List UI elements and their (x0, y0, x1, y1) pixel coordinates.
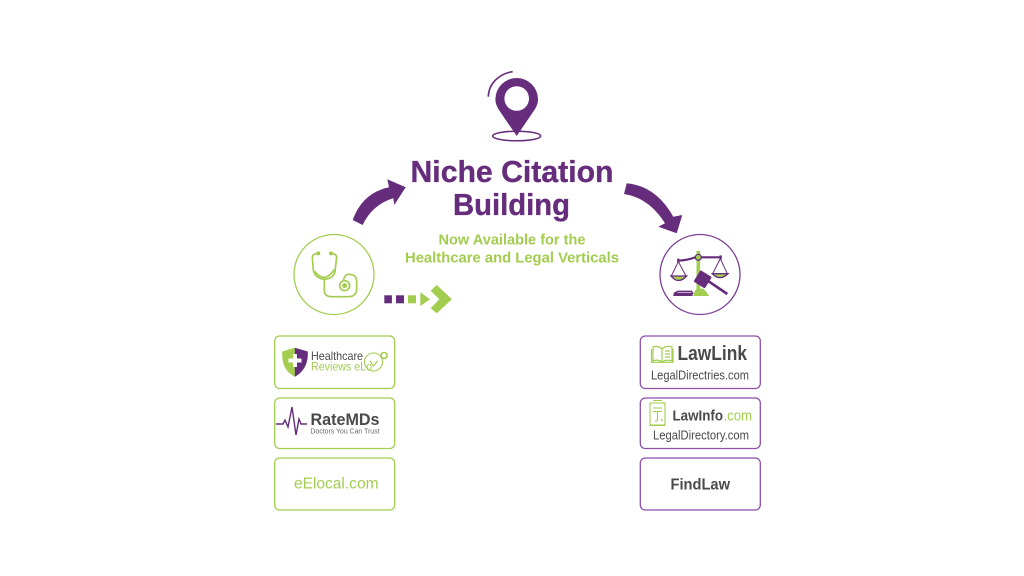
panel: Healthcare Reviews eLocal (275, 336, 395, 388)
panel: FindLaw (640, 458, 760, 510)
arrow: healthcare to title (353, 179, 406, 225)
title (410, 155, 614, 222)
panel: Healthcare Reviews eLocal: Healthcare (311, 349, 363, 363)
panel: LawInfo (640, 398, 760, 448)
panel: LawInfo: .com (724, 408, 752, 425)
panel: RateMDs: Doctors You Can Trust (310, 426, 380, 436)
panel: LawLink: LawLink (678, 343, 748, 365)
panel: eElocal (275, 458, 395, 510)
panel: FindLaw: FindLaw (670, 476, 731, 494)
icon: pulse (276, 407, 307, 435)
panel: RateMDs (275, 398, 395, 448)
panel: eElocal: eElocal.com (294, 476, 378, 492)
icon: open book (652, 346, 673, 362)
panel: LawInfo: LegalDirectory.com (653, 428, 749, 442)
icon: scroll (650, 400, 666, 426)
icon: shield (282, 348, 308, 377)
icon: scales and gavel circle (660, 234, 740, 314)
panel: RateMDs: RateMDs (310, 410, 380, 429)
panel: LawLink: LegalDirectries.com (651, 368, 749, 382)
subtitle: Now Available for the (438, 232, 586, 248)
panel: LawInfo: LawInfo (672, 408, 723, 425)
icon: location pin (488, 72, 541, 141)
icon: review badge (364, 352, 387, 371)
title: Building (453, 188, 570, 222)
dotted arrow (384, 285, 452, 313)
panel: LawLink (640, 336, 760, 388)
icon: stethoscope circle (294, 234, 374, 314)
subtitle: Healthcare and Legal Verticals (405, 250, 619, 266)
panel: Healthcare Reviews eLocal: Reviews eLo (311, 362, 372, 374)
arrow: title to legal (624, 183, 682, 233)
subtitle (405, 232, 619, 266)
title: Niche Citation (410, 155, 614, 189)
